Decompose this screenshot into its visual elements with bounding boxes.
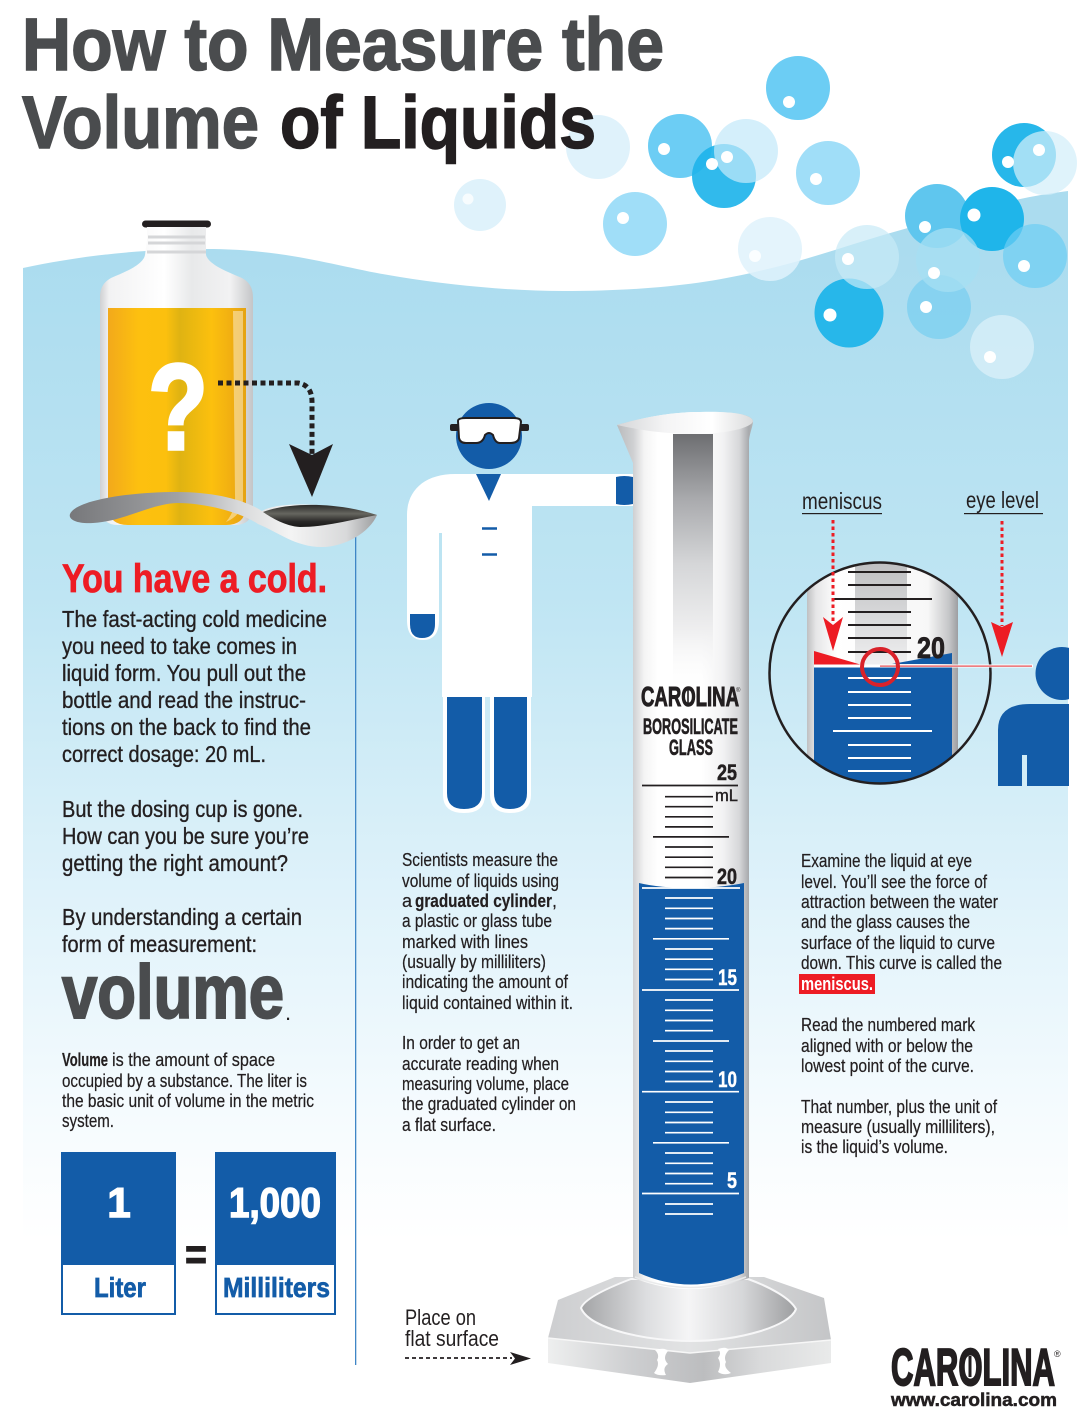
text block: intro story: correct dosage: 20 mL. [62, 741, 266, 767]
cylinder branding: ® [736, 687, 741, 694]
text block: volume definition: occupied by a substance. The liter is [62, 1071, 307, 1091]
text block: graduated cylinder explanation [402, 850, 576, 1135]
text block: volume definition: Volume [62, 1050, 108, 1070]
text block: intro story: you need to take comes in [62, 633, 297, 659]
text block: meniscus explanation: surface of the liquid to curve [801, 933, 995, 953]
text block: meniscus explanation [801, 851, 1002, 1157]
heading: volume: volume [62, 950, 284, 1035]
eye level line [814, 664, 1033, 668]
icon: spoon [70, 492, 377, 547]
vertical divider line [355, 535, 356, 1365]
lab coat [407, 474, 633, 813]
legs [447, 697, 527, 809]
arrow: eye level [991, 521, 1013, 657]
scale numbers: 5 [727, 1168, 737, 1193]
text block: meniscus explanation: That number, plus the unit of [801, 1097, 998, 1117]
text block: graduated cylinder explanation: indicating the amount of [402, 972, 569, 992]
text block: meniscus explanation: lowest point of the curve. [801, 1056, 974, 1076]
heading: you have a cold: You have a cold. [62, 557, 327, 601]
text block: graduated cylinder explanation: volume of liquids using [402, 871, 559, 891]
text block: graduated cylinder explanation: a flat surface. [402, 1115, 496, 1135]
label: place on flat surface: Place on [405, 1305, 476, 1330]
head [456, 403, 522, 469]
text block: graduated cylinder explanation: liquid contained within it. [402, 993, 573, 1013]
text block: meniscus explanation: down. This curve is called the [801, 953, 1002, 973]
scale numbers: 15 [718, 965, 737, 990]
text block: meniscus explanation: Examine the liquid at eye [801, 851, 972, 871]
box: 1,000 milliliters: 1,000 [229, 1179, 321, 1226]
right hand [616, 476, 633, 505]
text block: graduated cylinder explanation: , [552, 891, 557, 911]
text block: graduated cylinder explanation: In order to get an [402, 1033, 520, 1053]
text block: graduated cylinder explanation: a [402, 891, 413, 911]
text block: intro story: The fast-acting cold medicine [62, 606, 327, 632]
scale numbers: 25 [717, 760, 737, 785]
text block: intro story: liquid form. You pull out the [62, 660, 306, 686]
text block: intro story: How can you be sure you’re [62, 823, 309, 849]
scale numbers: 10 [718, 1067, 737, 1092]
text block: meniscus explanation: aligned with or below the [801, 1036, 973, 1056]
scale numbers: mL [715, 786, 738, 805]
collar [476, 474, 501, 501]
text block: volume definition: is the amount of space [112, 1050, 275, 1070]
inner shadow band [673, 434, 713, 694]
label: place on flat surface [405, 1305, 531, 1365]
left hand [410, 614, 435, 638]
text block: volume definition [62, 1050, 314, 1131]
logo: Carolina: ® [1054, 1349, 1061, 1359]
box: 1,000 milliliters [215, 1152, 336, 1315]
cylinder branding: CAROLINA [641, 681, 739, 712]
scale numbers: 20 [717, 864, 737, 889]
box: 1 liter [61, 1152, 176, 1315]
equals sign: = [185, 1230, 207, 1279]
cylinder base [548, 1277, 831, 1383]
box: 1,000 milliliters: Milliliters [223, 1272, 330, 1303]
cylinder branding [641, 681, 741, 760]
scale marks in liquid [642, 888, 740, 1214]
text block: graduated cylinder explanation: measuring volume, place [402, 1074, 569, 1094]
liquid [639, 883, 744, 1284]
text block: graduated cylinder explanation: graduated cylinder [415, 891, 552, 911]
bubbles [454, 56, 1077, 379]
text block: graduated cylinder explanation: (usually by milliliters) [402, 952, 546, 972]
label: eye level: eye level [966, 487, 1039, 513]
heading: volume: . [285, 1000, 291, 1025]
text block: intro story: bottle and read the instruc- [62, 687, 306, 713]
label: place on flat surface: flat surface [405, 1326, 499, 1351]
goggles [450, 418, 529, 443]
meniscus magnifier circle: 20 [917, 632, 945, 665]
cylinder branding: GLASS [669, 735, 713, 760]
scale numbers [715, 760, 738, 1193]
text block: meniscus explanation: measure (usually milliliters), [801, 1117, 995, 1137]
title [22, 3, 664, 164]
figure: scientist [407, 403, 633, 813]
title: of Liquids [280, 81, 596, 164]
text block: intro story [62, 606, 327, 957]
title: How to Measure the [22, 3, 664, 86]
arrow: meniscus [823, 520, 843, 651]
text block: intro story: But the dosing cup is gone. [62, 796, 303, 822]
box: 1 liter: 1 [107, 1179, 131, 1226]
text block: intro story: By understanding a certain [62, 904, 302, 930]
cylinder branding: BOROSILICATE [643, 714, 738, 739]
text block: graduated cylinder explanation: the graduated cylinder on [402, 1094, 576, 1114]
dotted arrow from bottle to spoon [218, 383, 333, 497]
box: 1 liter: Liter [94, 1272, 146, 1303]
meniscus magnifier circle [770, 560, 990, 792]
text block: intro story: getting the right amount? [62, 850, 288, 876]
text block: meniscus explanation: Read the numbered mark [801, 1015, 976, 1035]
text block: graduated cylinder explanation: a plastic or glass tube [402, 911, 552, 931]
question mark: ? [148, 340, 208, 476]
red circle marking meniscus low point [862, 649, 898, 685]
text block: graduated cylinder explanation: accurate reading when [402, 1054, 559, 1074]
text block: intro story: tions on the back to find the [62, 714, 311, 740]
text block: volume definition: system. [62, 1111, 114, 1131]
label: meniscus: meniscus [802, 488, 882, 514]
text block: graduated cylinder explanation: marked with lines [402, 932, 528, 952]
scale marks above liquid [642, 786, 738, 878]
text block: meniscus explanation: and the glass causes the [801, 912, 970, 932]
text block: meniscus explanation: level. You’ll see the force of [801, 872, 988, 892]
text block: intro story: form of measurement: [62, 931, 257, 957]
text block: graduated cylinder explanation: Scientists measure the [402, 850, 558, 870]
text block: meniscus explanation: attraction between the water [801, 892, 998, 912]
spoon liquid [263, 505, 377, 527]
text block: meniscus explanation: is the liquid’s volume. [801, 1137, 948, 1157]
coat buttons [482, 528, 497, 554]
highlighted word: meniscus: meniscus. [801, 974, 873, 994]
graduated cylinder [617, 412, 753, 1289]
title: Volume [22, 81, 259, 164]
glass tube [617, 412, 753, 1289]
icon: medicine bottle [100, 220, 253, 525]
icon: observer silhouette [998, 647, 1069, 786]
text block: volume definition: the basic unit of volume in the metric [62, 1091, 314, 1111]
